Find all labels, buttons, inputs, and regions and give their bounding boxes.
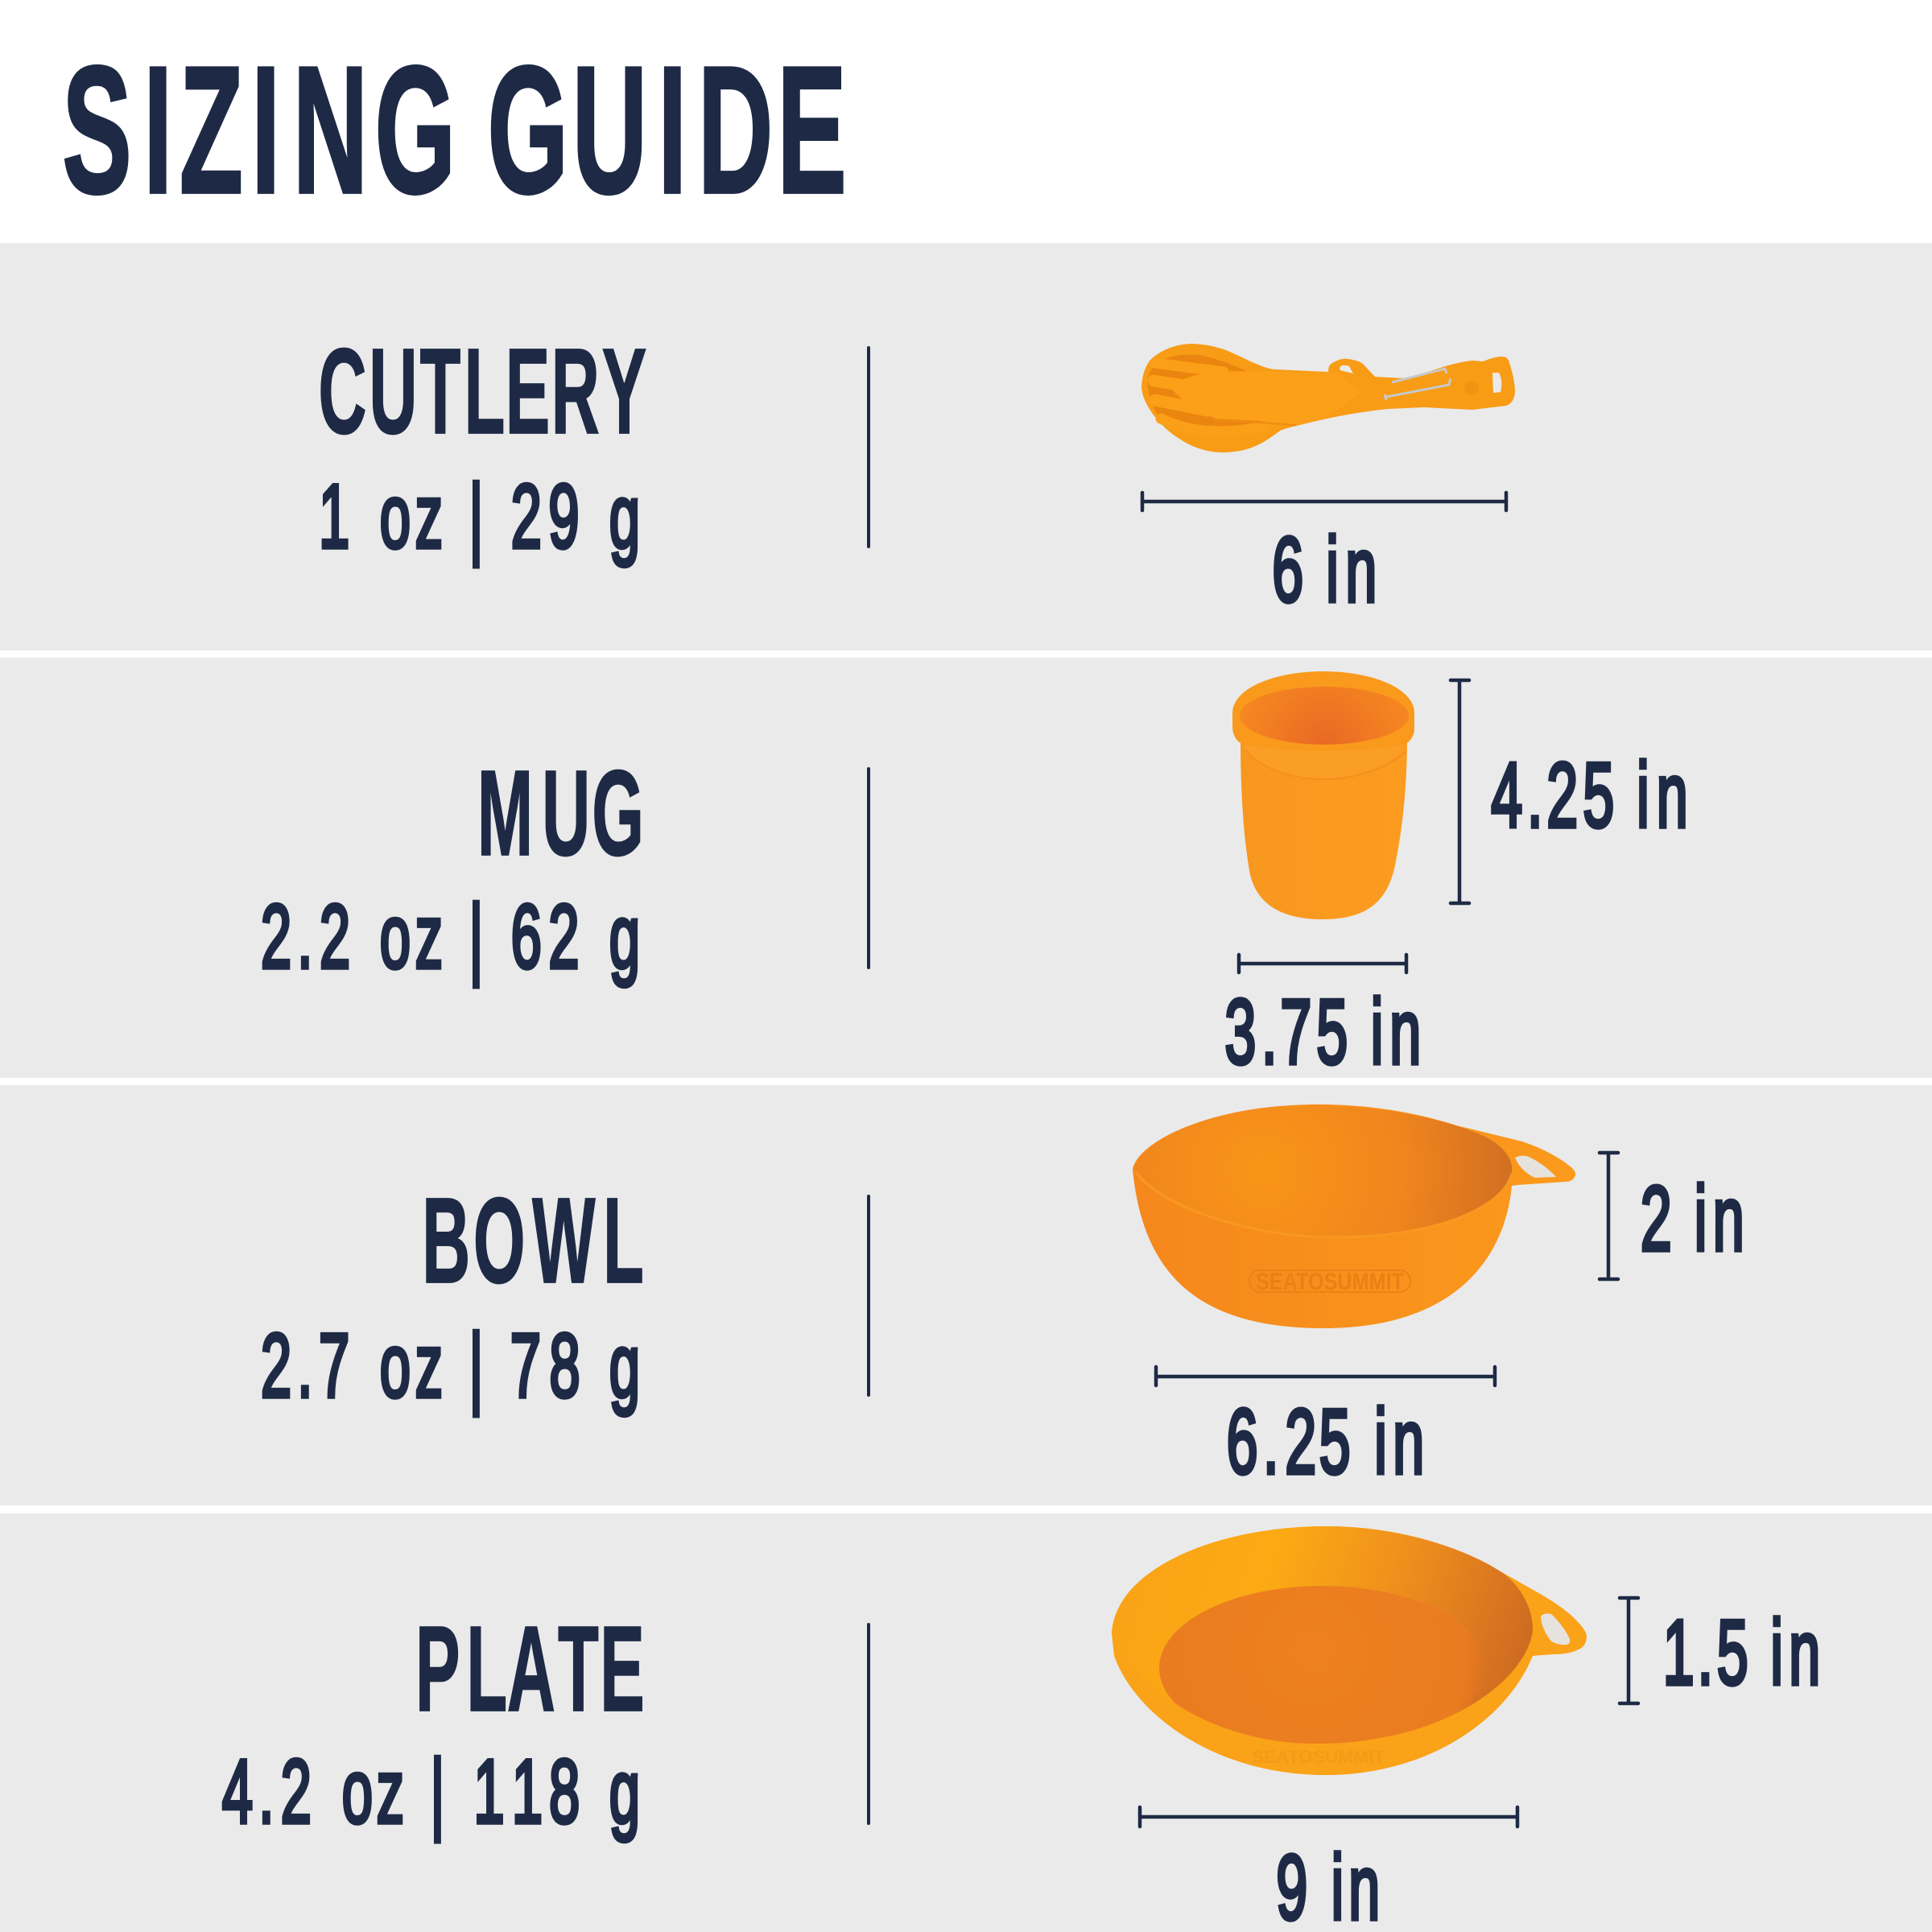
vertical divider [867,1623,870,1825]
label: bowl height value: 2 in [1641,1168,1744,1270]
label: mug width value: 3.75 in [1224,981,1421,1084]
plate logo: SEATOSUMMIT [1252,1747,1385,1767]
arrow: plate height [1620,1598,1638,1703]
label: plate weight: 4.2 oz | 118 g [222,1741,640,1842]
vertical divider [867,1195,870,1397]
arrow: mug height [1451,680,1469,903]
icon: bowl [1133,1104,1575,1328]
label: cutlery weight: 1 oz | 29 g [319,466,640,567]
label: cutlery name: CUTLERY [318,324,646,459]
vertical divider [867,767,870,969]
label: bowl name: BOWL [422,1173,644,1308]
panel: bowl [0,1085,1932,1505]
vertical divider [867,346,870,548]
title: SIZING GUIDE [62,28,847,231]
label: mug name: MUG [477,745,644,881]
arrow: bowl height [1600,1153,1618,1279]
bowl logo: SEATOSUMMIT [1256,1269,1404,1295]
label: plate height value: 1.5 in [1663,1602,1820,1704]
label: mug height value: 4.25 in [1491,745,1688,847]
arrow: mug width [1239,955,1406,972]
icon: cutlery set [1141,344,1515,452]
label: bowl weight: 2.7 oz | 78 g [261,1315,640,1416]
label: plate name: PLATE [415,1601,645,1736]
panel: cutlery [0,243,1932,650]
arrow: bowl width [1156,1367,1495,1385]
label: bowl width value: 6.25 in [1227,1391,1424,1493]
panel: plate [0,1513,1932,1932]
label: cutlery width value: 6 in [1272,519,1377,621]
arrow: cutlery width [1142,493,1506,510]
panel: mug [0,658,1932,1084]
label: mug weight: 2.2 oz | 62 g [261,886,640,987]
icon: mug [1232,671,1414,919]
arrow: plate width [1140,1807,1517,1827]
icon: plate [1112,1526,1587,1775]
